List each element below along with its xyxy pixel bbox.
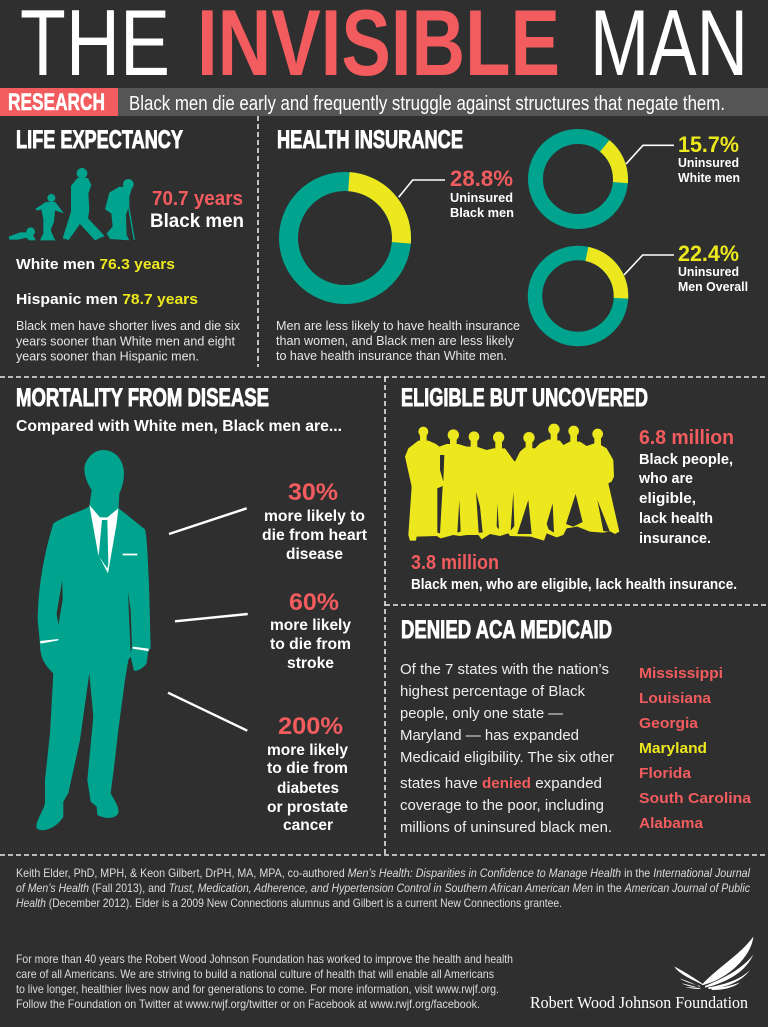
pointer: heart disease <box>169 508 247 534</box>
stat: black men life expectancy: Black men <box>150 211 244 232</box>
list: states: Louisiana <box>639 690 712 707</box>
logo: robert wood johnson foundation: Robert Wood Johnson Foundation <box>530 993 748 1012</box>
stat: heart disease <box>262 479 367 563</box>
stat: diabetes or prostate cancer: to die from <box>267 760 348 777</box>
panel: mortality from disease <box>16 384 367 834</box>
callout: 22.4%: Uninsured <box>678 264 739 279</box>
stat: heart disease: more likely to <box>264 508 365 525</box>
text block: foundation statement: Follow the Foundation on Twitter at www.rwjf.org/twitter or on Facebook at www.rwjf.org/facebook. <box>16 997 480 1011</box>
text block: health insurance note: to have health insurance than White men. <box>276 349 507 363</box>
callout: 15.7% <box>626 132 740 185</box>
text block: health insurance note: than women, and Black men are less likely <box>276 334 515 348</box>
callout: 22.4%: Men Overall <box>678 279 748 294</box>
heading: eligible but uncovered: ELIGIBLE BUT UNCOVERED <box>401 384 648 412</box>
stat: diabetes or prostate cancer: diabetes <box>277 780 339 797</box>
stat: black men life expectancy <box>150 188 244 232</box>
stat: 6.8 million: eligible, <box>639 490 696 507</box>
panel: life expectancy <box>9 126 244 364</box>
text block: life expectancy note: years sooner than Hispanic men. <box>16 350 199 364</box>
donut chart: uninsured men overall <box>535 253 621 339</box>
logo: robert wood johnson foundation <box>530 937 753 1012</box>
stat: diabetes or prostate cancer: cancer <box>283 817 333 834</box>
text block: life expectancy note: Black men have shorter lives and die six <box>16 319 241 333</box>
callout: 22.4%: 22.4% <box>678 241 739 266</box>
subheading: comparison: Compared with White men, Black men are... <box>16 418 342 435</box>
icon: stages of life silhouettes <box>9 168 134 240</box>
stat: heart disease: 30% <box>288 479 338 506</box>
icon: wings <box>674 937 753 990</box>
stat: diabetes or prostate cancer: more likely <box>267 742 348 759</box>
stat: diabetes or prostate cancer: 200% <box>278 713 343 740</box>
stat: heart disease: disease <box>286 546 343 563</box>
icon: group of men silhouette <box>405 424 619 541</box>
text block: medicaid explanation: millions of uninsured black men. <box>400 819 612 836</box>
text block: health insurance note: Men are less likely to have health insurance <box>276 319 520 333</box>
callout: 15.7%: White men <box>678 170 740 185</box>
stat: 6.8 million: who are <box>638 470 693 487</box>
callout: 15.7%: 15.7% <box>678 132 739 157</box>
pointer: diabetes or prostate cancer <box>168 693 247 731</box>
icon: man in suit silhouette <box>36 450 151 830</box>
text block: medicaid explanation: Maryland — has expanded <box>400 727 579 744</box>
callout: 22.4% <box>624 241 748 294</box>
callout: 28.8% <box>399 166 514 220</box>
list: states: Maryland <box>639 740 707 757</box>
callout: 15.7%: Uninsured <box>678 155 739 170</box>
donut chart: uninsured white men <box>536 136 620 222</box>
stat: 6.8 million: lack health <box>639 510 713 527</box>
text block: medicaid explanation <box>400 661 614 836</box>
stat: 6.8 million: Black people, <box>639 451 733 468</box>
text block: life expectancy note <box>16 319 241 364</box>
title <box>20 0 748 95</box>
text block: authors: Keith Elder, PhD, MPH, & Keon Gilbert, DrPH, MA, MPA, co-authored Men’s Health: Disparities in Confidence to Manage Health in the International Journal <box>16 866 750 880</box>
research banner: RESEARCH <box>8 89 105 116</box>
stat: 3.8 million <box>411 552 737 593</box>
text block: authors <box>16 866 750 910</box>
stat: white men: White men 76.3 years <box>16 256 175 273</box>
text block: medicaid explanation: states have denied expanded <box>400 775 602 792</box>
text block: authors: of Men’s Health (Fall 2013), and Trust, Medication, Adherence, and Hypertension Control in Southern African American Men in the American Journal of Public <box>16 881 750 895</box>
list: states: South Carolina <box>639 790 752 807</box>
text block: foundation statement: care of all Americans. We are striving to build a national culture of health that will enable all Americans <box>16 967 494 981</box>
text block: foundation statement: For more than 40 years the Robert Wood Johnson Foundation has worked to improve the health and health <box>16 952 513 966</box>
text block: medicaid explanation: Medicaid eligibility. The six other <box>400 749 614 766</box>
stat: stroke: more likely <box>270 617 351 634</box>
list: states: Mississippi <box>639 665 723 682</box>
text block: medicaid explanation: highest percentage of Black <box>400 683 585 700</box>
callout: 28.8%: Uninsured <box>450 190 513 205</box>
text block: life expectancy note: years sooner than White men and eight <box>16 334 236 348</box>
panel: denied ACA medicaid <box>400 616 752 836</box>
heading: denied aca medicaid: DENIED ACA MEDICAID <box>401 616 612 644</box>
text block: medicaid explanation: Of the 7 states with the nation’s <box>400 661 609 678</box>
stat: stroke <box>270 589 351 672</box>
text block: medicaid explanation: coverage to the poor, including <box>400 797 604 814</box>
panel: eligible but uncovered <box>401 384 737 593</box>
stat: 6.8 million <box>638 427 734 547</box>
text block: health insurance note <box>276 319 520 363</box>
panel: health insurance <box>276 126 748 363</box>
stat: stroke: to die from <box>270 636 351 653</box>
heading: health insurance: HEALTH INSURANCE <box>277 126 463 154</box>
stat: 6.8 million: insurance. <box>639 530 711 547</box>
text block: authors: Health (December 2012). Elder is a 2009 New Connections alumnus and Gilbert is a current New Connections grantee. <box>16 896 562 910</box>
list: states: Georgia <box>639 715 699 732</box>
stat: diabetes or prostate cancer <box>267 713 348 834</box>
stat: 3.8 million: 3.8 million <box>411 552 499 574</box>
stat: black men life expectancy: 70.7 years <box>152 188 243 210</box>
callout: 28.8%: Black men <box>450 205 514 220</box>
stat: 3.8 million: Black men, who are eligible, lack health insurance. <box>411 577 737 593</box>
heading: mortality from disease: MORTALITY FROM DISEASE <box>16 384 269 412</box>
stat: hispanic men: Hispanic men 78.7 years <box>16 291 198 308</box>
text block: foundation statement: to live longer, healthier lives now and for generations to come. For more information, visit www.rwjf.org. <box>16 982 499 996</box>
heading: life expectancy: LIFE EXPECTANCY <box>16 126 183 154</box>
research banner <box>0 88 768 116</box>
stat: 6.8 million: 6.8 million <box>639 427 734 449</box>
stat: stroke: stroke <box>287 655 334 672</box>
list: states: Florida <box>639 765 692 782</box>
text block: medicaid explanation: people, only one state — <box>400 705 563 722</box>
callout: 28.8%: 28.8% <box>450 166 513 191</box>
stat: heart disease: die from heart <box>262 527 367 544</box>
list: states: Alabama <box>639 815 704 832</box>
stat: stroke: 60% <box>289 589 339 616</box>
donut chart: uninsured black men <box>288 182 402 294</box>
list: states <box>639 665 752 832</box>
pointer: stroke <box>175 614 248 621</box>
stat: diabetes or prostate cancer: or prostate <box>267 799 348 816</box>
text block: foundation statement <box>16 952 513 1011</box>
